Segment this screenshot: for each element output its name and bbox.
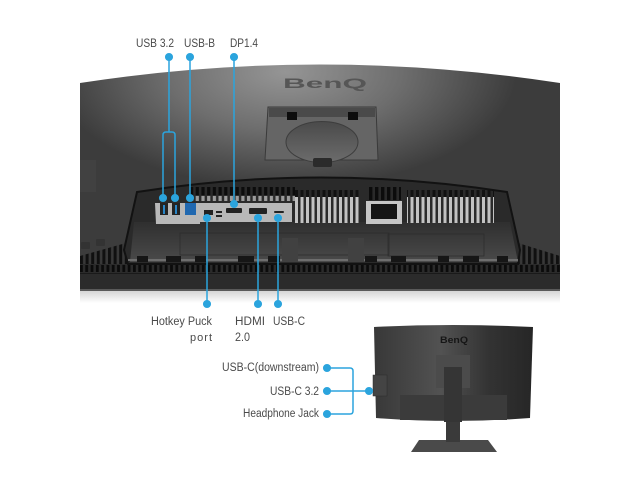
lip tabs xyxy=(128,256,518,262)
side port housing xyxy=(373,375,387,396)
USB 3.2 leader xyxy=(160,54,178,201)
label: USB 3.2: USB 3.2 xyxy=(136,38,174,50)
label: Hotkey Puck port xyxy=(151,316,212,344)
label: Hotkey Puck port: port xyxy=(190,332,212,344)
compartment floor xyxy=(130,222,518,262)
USB-B leader xyxy=(187,54,193,201)
callout lines and dots: top ports xyxy=(160,54,281,307)
small monitor shell xyxy=(374,325,533,421)
upper vent row xyxy=(190,187,295,202)
VESA recess xyxy=(265,107,378,167)
HDMI leader xyxy=(255,215,261,307)
power socket xyxy=(366,187,402,224)
label: Headphone Jack: Headphone Jack xyxy=(243,408,319,420)
light vent slots xyxy=(295,190,360,223)
label: USB-B: USB-B xyxy=(184,38,215,50)
left side buttons xyxy=(80,160,105,249)
Hotkey Puck leader xyxy=(204,215,210,307)
label: HDMI 2.0: 2.0 xyxy=(235,332,250,344)
USB-C leader xyxy=(275,215,281,307)
BenQ logo: BenQ xyxy=(283,75,367,91)
label: HDMI 2.0 xyxy=(235,316,265,344)
label: USB-C: USB-C xyxy=(273,316,305,328)
lower bezel band xyxy=(80,264,560,290)
stand pillars xyxy=(282,238,364,262)
small BenQ logo: BenQ xyxy=(440,335,468,345)
label: USB-C 3.2: USB-C 3.2 xyxy=(270,386,319,398)
stand neck xyxy=(444,367,462,442)
port compartment xyxy=(124,178,520,264)
port plate xyxy=(155,203,292,224)
DP leader xyxy=(231,54,237,207)
label: DP1.4: DP1.4 xyxy=(230,38,259,50)
side port callout xyxy=(324,365,372,417)
lower panel xyxy=(400,395,507,420)
small monitor xyxy=(373,325,533,452)
floor shadow xyxy=(80,291,560,303)
VESA area xyxy=(436,355,470,388)
large monitor back xyxy=(80,64,560,303)
label: USB-C downstream: USB-C(downstream) xyxy=(222,362,319,374)
label: HDMI 2.0: HDMI xyxy=(235,316,265,328)
label: Hotkey Puck port: Hotkey Puck xyxy=(151,316,212,328)
stand base xyxy=(411,440,497,452)
back shell xyxy=(80,64,560,291)
lower vents left and right xyxy=(80,243,560,268)
